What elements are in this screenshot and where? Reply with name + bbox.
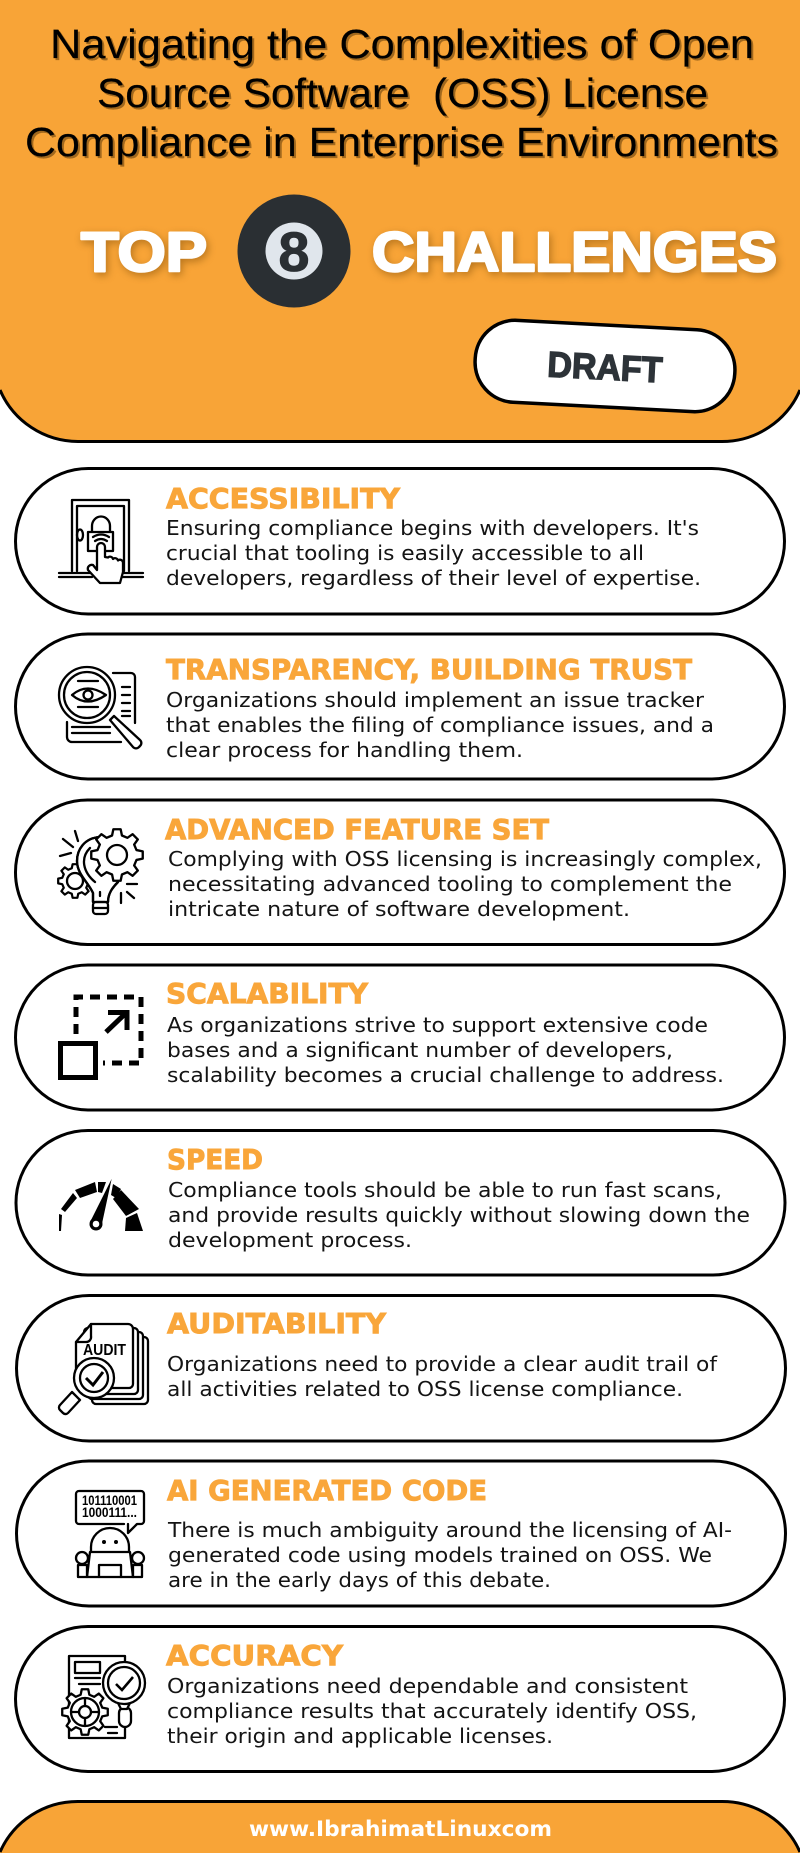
panel: speed (16, 1130, 785, 1275)
heading: AUDITABILITY (167, 1309, 387, 1340)
body text: scalability becomes a crucial challenge to address. (167, 1063, 724, 1087)
icon: door lock with hand (59, 500, 143, 583)
icon: bulb with gears (58, 829, 143, 914)
heading: TRANSPARENCY, BUILDING TRUST (166, 655, 692, 686)
body text (167, 1352, 718, 1401)
heading: SCALABILITY (166, 979, 369, 1010)
panel: scalability (16, 965, 784, 1110)
header panel (0, 0, 800, 442)
body text: As organizations strive to support extensive code (167, 1013, 708, 1037)
body text: intricate nature of software development. (168, 897, 630, 921)
badge: number 8 (238, 194, 350, 308)
body text (167, 1013, 724, 1087)
body text: development process. (168, 1228, 412, 1252)
body text: Organizations need to provide a clear audit trail of (167, 1352, 718, 1376)
body text: and provide results quickly without slowing down the (168, 1203, 750, 1227)
body text: that enables the filing of compliance issues, and a (166, 713, 714, 737)
body text: developers, regardless of their level of expertise. (166, 566, 701, 590)
icon: speedometer (59, 1175, 143, 1231)
body text: necessitating advanced tooling to complement the (168, 872, 732, 896)
panel: advanced feature set (16, 800, 784, 944)
heading: ADVANCED FEATURE SET (165, 815, 549, 846)
icon: scale up arrow (60, 997, 141, 1078)
body text: their origin and applicable licenses. (167, 1724, 553, 1748)
title: Navigating the Complexities of Open (50, 21, 754, 67)
draft badge: DRAFT (546, 344, 663, 390)
heading: AI GENERATED CODE (167, 1476, 487, 1507)
footer panel (0, 1801, 800, 1853)
body text: clear process for handling them. (166, 738, 523, 762)
icon: audit documents (59, 1324, 148, 1414)
body text (166, 516, 701, 590)
heading: challenges: CHALLENGES (372, 220, 777, 283)
body text: Compliance tools should be able to run fast scans, (168, 1178, 722, 1202)
body text (168, 847, 762, 921)
body text: Organizations should implement an issue tracker (166, 688, 705, 712)
title: Compliance in Enterprise Environments (25, 119, 778, 165)
heading: ACCESSIBILITY (166, 484, 401, 515)
body text: crucial that tooling is easily accessible to all (166, 541, 644, 565)
icon: audit documents: AUDIT (83, 1342, 126, 1359)
heading: SPEED (167, 1145, 263, 1176)
panel: ai generated code (16, 1461, 786, 1606)
body text: compliance results that accurately identify OSS, (167, 1699, 697, 1723)
body text: There is much ambiguity around the licensing of AI- (167, 1518, 732, 1542)
icon: robot with binary speech bubble (76, 1491, 144, 1577)
body text: Organizations need dependable and consistent (167, 1674, 688, 1698)
panel: accuracy (16, 1626, 784, 1772)
icon: magnifier over document (59, 667, 141, 748)
body text (167, 1674, 697, 1748)
body text (166, 688, 714, 762)
icon: document gear and magnifier (62, 1656, 145, 1738)
footer url: www.IbrahimatLinuxcom (249, 1817, 552, 1841)
panel: accessibility (16, 468, 784, 614)
body text: bases and a significant number of developers, (167, 1038, 673, 1062)
draft badge (473, 318, 737, 414)
title (25, 21, 778, 165)
heading: top: TOP (81, 220, 207, 283)
heading: ACCURACY (166, 1641, 344, 1672)
icon: robot with binary speech bubble: 101110001 (82, 1492, 137, 1508)
panel: transparency (16, 634, 784, 779)
badge: number 8: 8 (278, 220, 310, 283)
body text: Ensuring compliance begins with developers. It's (166, 516, 699, 540)
title: Source Software (OSS) License (97, 70, 708, 116)
body text: all activities related to OSS license compliance. (167, 1377, 683, 1401)
body text (167, 1518, 732, 1592)
body text: are in the early days of this debate. (168, 1568, 551, 1592)
icon: robot with binary speech bubble: 1000111... (82, 1504, 137, 1520)
body text (168, 1178, 750, 1252)
body text: Complying with OSS licensing is increasingly complex, (168, 847, 762, 871)
panel: auditability (16, 1296, 786, 1441)
body text: generated code using models trained on OSS. We (168, 1543, 712, 1567)
